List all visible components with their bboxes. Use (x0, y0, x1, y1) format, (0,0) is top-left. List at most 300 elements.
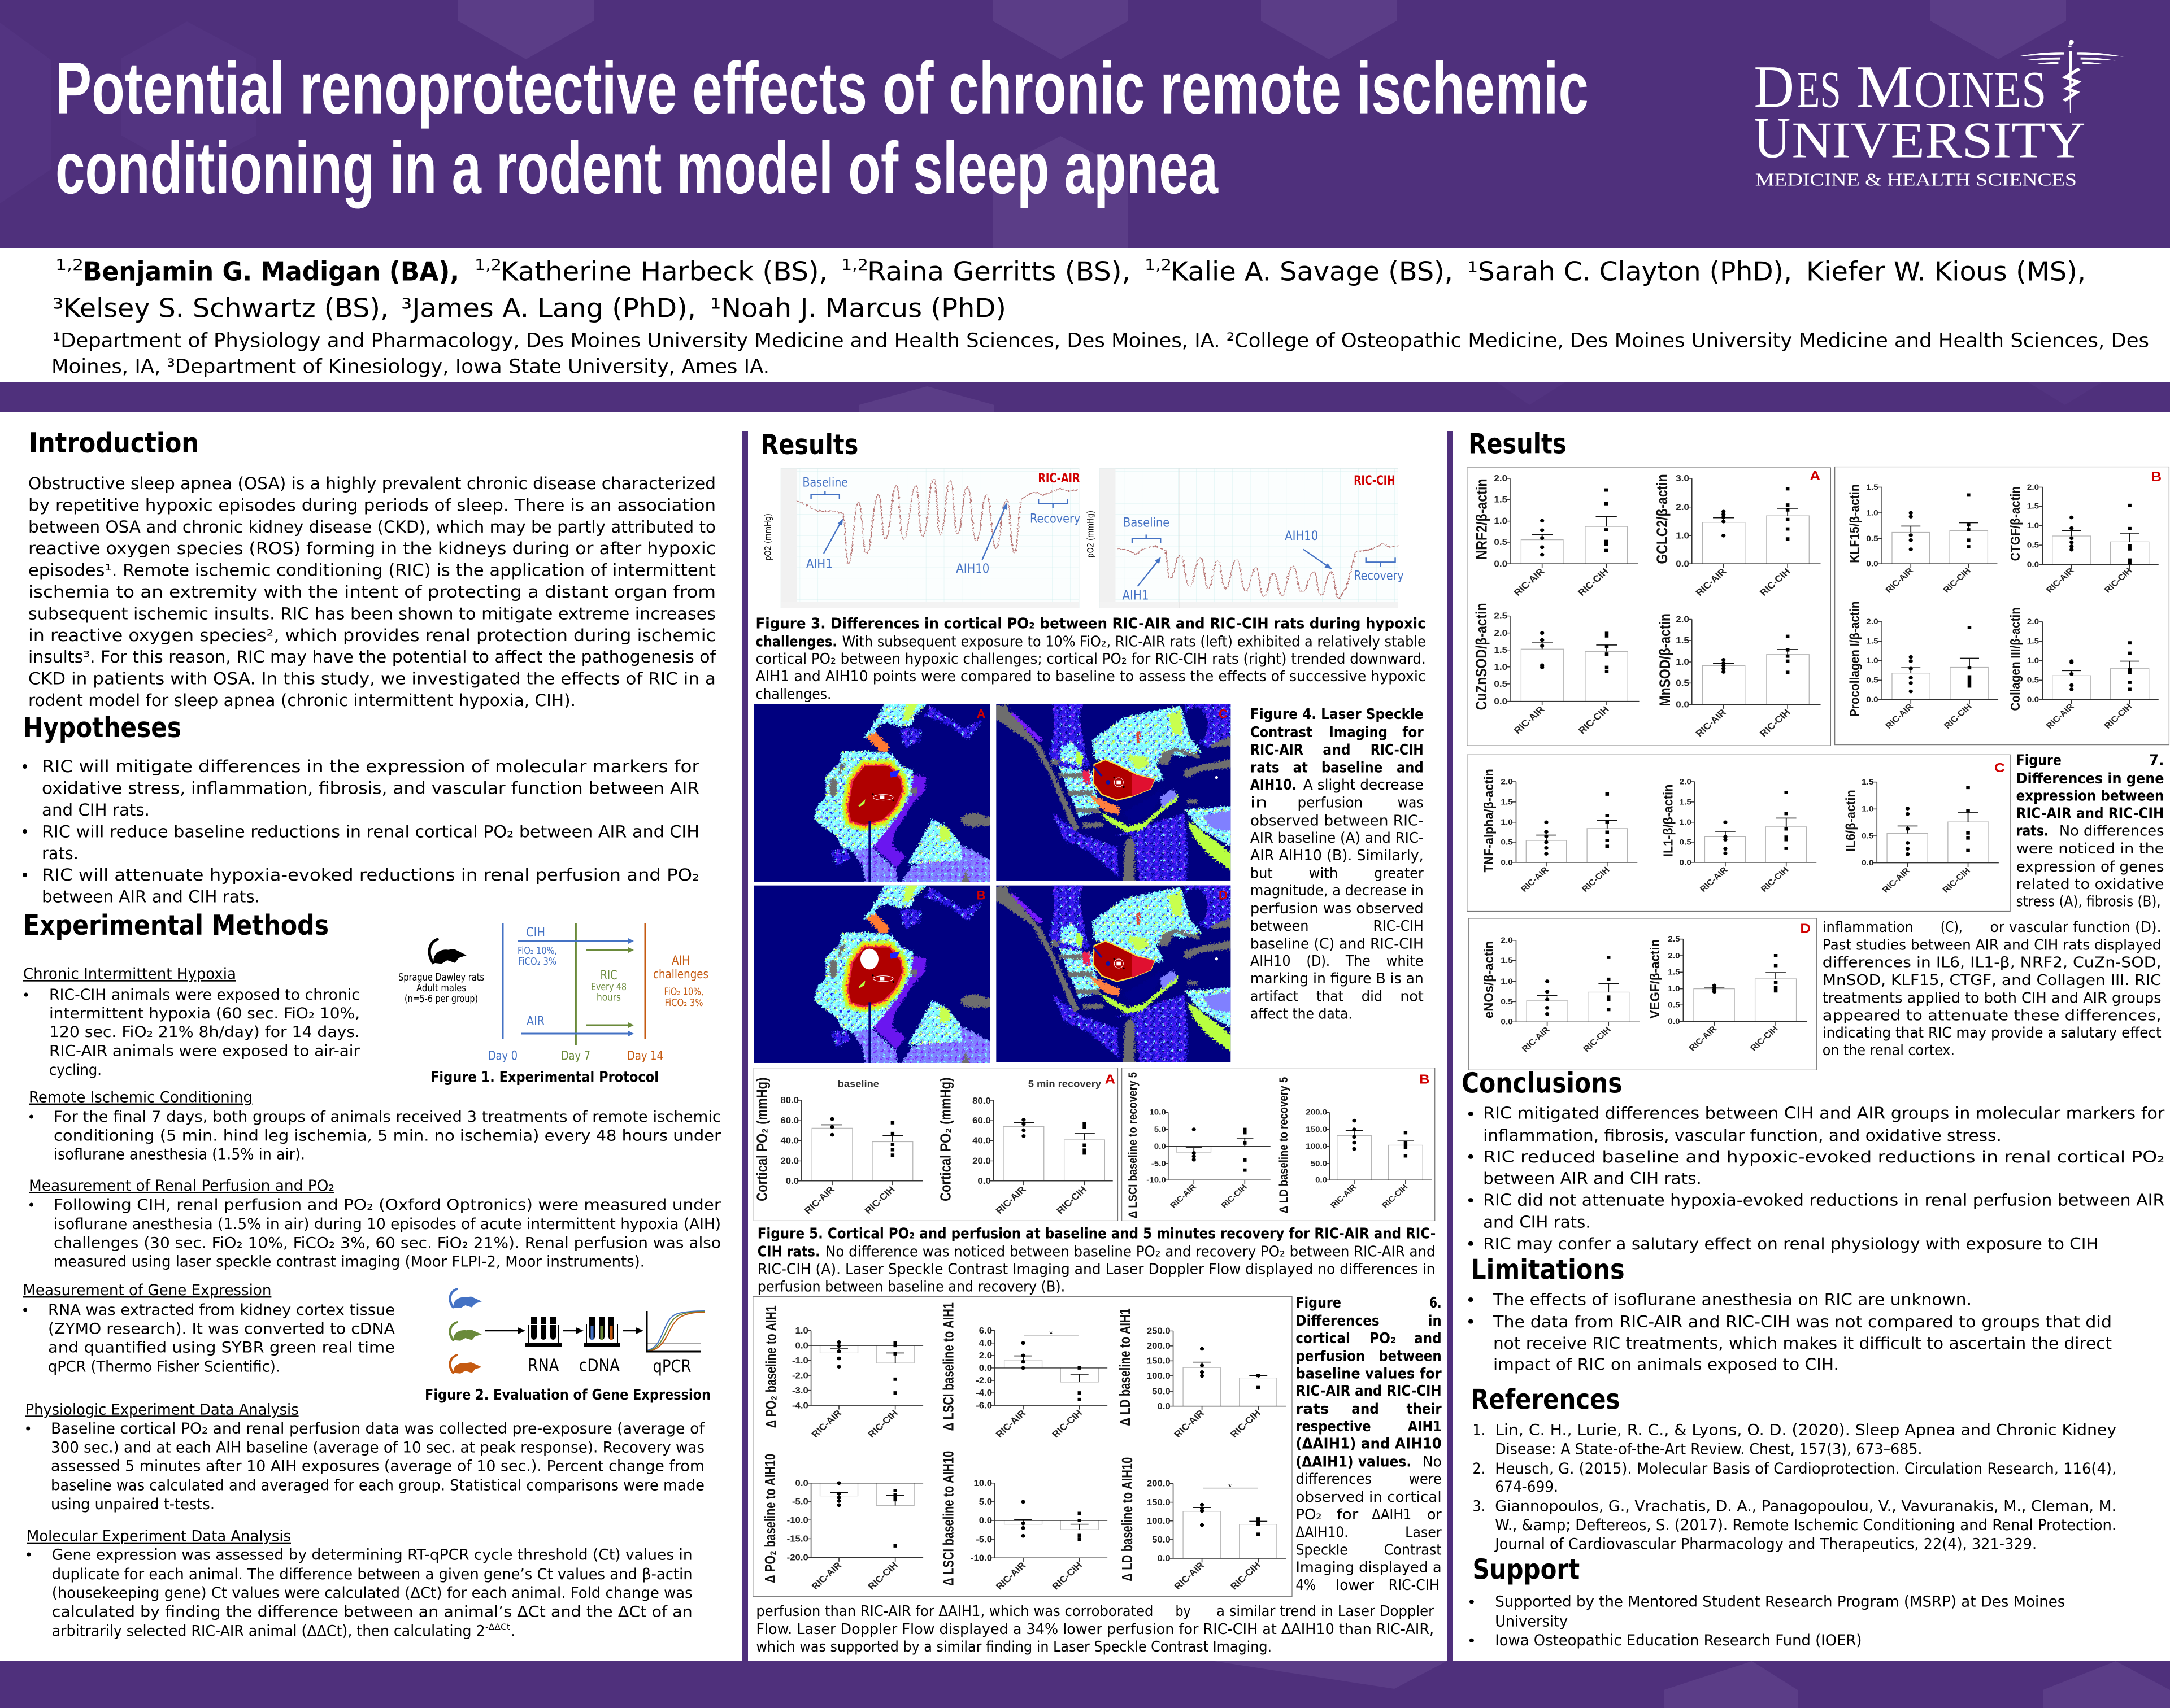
list: conclusions: RIC may confer a salutary effect on renal physiology with exposure to CIH (1483, 1235, 2099, 1254)
caption: figure 6: by (1176, 1603, 1191, 1620)
timeline labels: RIC (600, 969, 617, 983)
chart: LD baseline to AIH10: RIC-AIR (1172, 1560, 1206, 1592)
list: hypotheses (23, 757, 699, 907)
caption: figure 4: AIR AIH10 (B). Similarly, (1250, 847, 1424, 864)
chart: eNOs: 1.0 (1501, 977, 1513, 986)
chart: IL1-beta: RIC-CIH (1759, 865, 1791, 894)
panel: results column 3 (1467, 428, 2169, 1070)
panel: results column 2 upper (756, 429, 1426, 1022)
list: hypotheses: and CIH rats. (42, 800, 150, 820)
authors: Raina Gerritts (BS), (867, 256, 1130, 287)
caption: figure 4: that (1316, 988, 1343, 1005)
chart: LSCI baseline to AIH10: -10.0 (971, 1553, 992, 1563)
caption: figure 7: (C), (1941, 919, 1963, 936)
chart: LD baseline to recovery: Δ LD baseline to recovery 5 (1277, 1077, 1290, 1213)
text block: introduction body: CKD in patients with OSA. In this study, we investigated the effects of RIC in a (28, 669, 716, 689)
caption: figure 6: a similar trend in Laser Doppler (1216, 1603, 1434, 1620)
chart: Collagen III: Collagen III/β-actin (2008, 607, 2023, 711)
chart: LSCI baseline to AIH1: 0.0 (979, 1363, 992, 1373)
chart: LD baseline to recovery: 0.0 (1315, 1176, 1327, 1185)
authors: Kiefer W. Kious (MS), (1806, 256, 2086, 287)
chart: LD baseline to AIH1: 0.0 (1157, 1401, 1171, 1411)
figure 7 panel B (1835, 467, 2169, 745)
text block: introduction body: between OSA and chronic kidney disease (CKD), which may be partly attributed to (28, 517, 716, 537)
text: animals (398, 971, 484, 1005)
caption: figure 4: greater (1374, 865, 1424, 882)
method: gene expression: (ZYMO research). It was converted to cDNA (48, 1321, 395, 1338)
chart: PO2 baseline to AIH1: RIC-AIR (810, 1408, 844, 1440)
caption: figure 5: Figure 5. Cortical PO₂ and perfusion at baseline and 5 minutes recovery for RIC-AIR and RIC- (758, 1225, 1436, 1242)
chart: VEGF (1647, 922, 1811, 1053)
method: molecular data analysis: calculated by finding the difference between an animal’s ΔCt and the ΔCt of an (52, 1604, 693, 1621)
caption: figure 6: RIC-CIH (1389, 1577, 1440, 1594)
caption: figure 6: ΔAIH1 (1372, 1506, 1411, 1523)
chart: Procollagen I (1847, 602, 1998, 731)
timeline labels: Day 0 (488, 1049, 518, 1063)
text block: introduction body: in reactive oxygen species², which provides renal protection during ischemic (28, 626, 716, 645)
figure 7 panel D (1468, 918, 1816, 1070)
panel: hypotheses (23, 712, 699, 907)
chart: GCLC2: RIC-AIR (1694, 567, 1728, 598)
method: chronic intermittent hypoxia: 120 sec. FiO₂ 21% 8h/day) for 14 days. (49, 1023, 360, 1041)
figure 7 panel C (1467, 755, 2010, 911)
chart: IL1-beta: 0.5 (1680, 838, 1691, 847)
chart: 5 min recovery PO2: RIC-CIH (1054, 1184, 1089, 1216)
figure 3 chart: RIC-AIR: Recovery (1030, 511, 1080, 526)
chart: IL1-beta: 0.0 (1680, 859, 1691, 867)
authors (53, 256, 2086, 324)
caption: figure 4: magnitude, a decrease in (1250, 882, 1424, 899)
chart: IL1-beta: IL1-β/β-actin (1661, 785, 1676, 857)
text block: introduction body: rodent model for sleep apnea (chronic intermittent hypoxia, CIH). (28, 691, 576, 710)
text block: introduction body: episodes¹. Remote ischemic conditioning (RIC) is the application of intermittent (28, 561, 716, 580)
caption: figure 4: AIR baseline (A) and RIC- (1250, 830, 1424, 846)
method: remote ischemic conditioning: For the final 7 days, both groups of animals received 3 treatments of remote ischemic (54, 1108, 721, 1126)
figure 3 chart: RIC-CIH: Baseline (1123, 515, 1169, 530)
chart: TNF-alpha: RIC-CIH (1580, 865, 1612, 894)
caption: figure 7: MnSOD, KLF15, CTGF, and Collagen III. RIC (1823, 972, 2162, 989)
list: hypotheses: between AIR and CIH rats. (42, 887, 260, 907)
chart: LD baseline to AIH10: RIC-CIH (1228, 1560, 1263, 1592)
chart: VEGF: RIC-CIH (1749, 1025, 1780, 1053)
caption: figure 4: affect the data. (1250, 1006, 1353, 1022)
chart: Procollagen I: 0.5 (1866, 676, 1878, 685)
caption: figure 6: Speckle (1295, 1541, 1348, 1558)
chart: LD baseline to AIH1: 200.0 (1147, 1341, 1171, 1351)
caption: figure 6: which was supported by a similar finding in Laser Speckle Contrast Imaging. (756, 1639, 1272, 1655)
chart: baseline PO2: baseline (838, 1078, 879, 1089)
caption: figure 7 (1823, 752, 2164, 1059)
chart icon: qPCR curves (647, 1311, 705, 1352)
chart: MnSOD: MnSOD/β-actin (1657, 613, 1673, 706)
chart: LD baseline to AIH10: * (1228, 1482, 1232, 1492)
list: conclusions (1468, 1104, 2165, 1254)
chart: LSCI baseline to recovery (1126, 1072, 1271, 1218)
image B: B (977, 888, 986, 903)
caption: figure 3: With subsequent exposure to 10% FiO₂, RIC-AIR rats (left) exhibited a relatively stable (842, 633, 1426, 650)
timeline labels: FiO₂ 10%, (518, 945, 557, 957)
chart: PO2 baseline to AIH1 (763, 1305, 923, 1440)
text: animals: Adult males (416, 982, 466, 994)
chart: KLF15: 1.5 (1866, 483, 1878, 492)
chart: KLF15: 0.5 (1866, 534, 1878, 543)
caption: figure 6: Imaging displayed a (1295, 1559, 1442, 1576)
list: hypotheses: RIC will reduce baseline reductions in renal cortical PO₂ between AIR and CIH (42, 822, 699, 841)
chart: TNF-alpha: 0.5 (1501, 838, 1513, 847)
chart: Procollagen I: RIC-AIR (1884, 702, 1915, 731)
chart: NRF2: NRF2/β-actin (1474, 478, 1490, 559)
chart: VEGF: 0.0 (1668, 1018, 1680, 1026)
image D: D (1219, 888, 1228, 903)
chart: LSCI baseline to recovery: RIC-CIH (1220, 1183, 1249, 1210)
chart: LD baseline to recovery: RIC-AIR (1329, 1183, 1359, 1210)
chart: PO2 baseline to AIH1: -1.0 (792, 1356, 808, 1366)
method: renal perfusion and PO2: challenges (30 sec. FiO₂ 10%, FiCO₂ 3%, 60 sec. FiO₂ 21%). Renal perfusion was also (54, 1235, 721, 1252)
chart: GCLC2: RIC-CIH (1758, 567, 1793, 598)
chart: LSCI baseline to AIH1: 4.0 (979, 1338, 992, 1348)
caption: figure 4: and (1323, 742, 1351, 759)
chart: LSCI baseline to AIH1: -6.0 (976, 1401, 992, 1410)
chart: LD baseline to recovery: 50.0 (1311, 1160, 1327, 1168)
chart: LSCI baseline to recovery: -5.0 (1151, 1160, 1166, 1168)
caption: figure 3: AIH1 and AIH10 points were compared to baseline to assess the effects of successive hypoxic (756, 668, 1426, 685)
caption: figure 4: baseline (1321, 760, 1382, 776)
caption: figure 6: PO₂ (1369, 1330, 1396, 1347)
timeline labels: hours (597, 992, 621, 1004)
caption: figure 4: but (1250, 865, 1273, 882)
caption: figure 4: baseline (C) and RIC-CIH (1250, 936, 1424, 952)
chart: LD baseline to AIH1 (1117, 1308, 1286, 1440)
method: physiologic data analysis: Baseline cortical PO₂ and renal perfusion data was collected pre-exposure (average of (51, 1420, 705, 1437)
caption: figure 4: RIC-CIH (1373, 918, 1424, 935)
purple band under authors (0, 382, 2170, 412)
chart: IL1-beta (1661, 778, 1816, 894)
figure 3 chart: RIC-CIH: Recovery (1354, 568, 1404, 583)
list: support (1469, 1593, 2065, 1649)
chart: CuZnSOD (1473, 603, 1640, 736)
chart: LSCI baseline to AIH1: RIC-CIH (1050, 1408, 1084, 1440)
authors: 1,2 (475, 256, 502, 274)
caption: figure 3 (756, 615, 1426, 703)
chart: LSCI baseline to AIH1: 6.0 (979, 1326, 992, 1336)
method: chronic intermittent hypoxia: Chronic Intermittent Hypoxia (23, 965, 236, 983)
figure 2: gene expression workflow (425, 1289, 711, 1404)
caption: figure 7: on the renal cortex. (1823, 1042, 1955, 1059)
image C: C (1219, 707, 1228, 721)
chart: LD baseline to AIH1: Δ LD baseline to AIH1 (1117, 1308, 1133, 1426)
list: conclusions: inflammation, fibrosis, vascular function, and oxidative stress. (1483, 1127, 2002, 1145)
chart: LD baseline to recovery: RIC-CIH (1380, 1183, 1410, 1210)
figure 7 panel A (1467, 468, 1830, 746)
icons: three rats (450, 1289, 482, 1374)
chart: LSCI baseline to recovery: Δ LSCI baseline to recovery 5 (1126, 1072, 1140, 1218)
panel: conclusions, limitations, references, support (1462, 1068, 2165, 1649)
caption: figure 6: No (1423, 1453, 1442, 1470)
chart: IL6: 1.5 (1862, 778, 1874, 787)
chart: CTGF: 1.5 (2027, 502, 2039, 511)
chart: MnSOD: 1.5 (1676, 636, 1689, 646)
method: renal perfusion and PO2: isoflurane anesthesia (1.5% in air) during 10 episodes of acute intermittent hypoxia (AIH) (54, 1215, 721, 1233)
figure 3 chart: RIC-AIR: AIH10 (956, 561, 989, 576)
chart: NRF2: 0.5 (1494, 538, 1507, 547)
caption: figure 6: were (1408, 1471, 1442, 1488)
chart: GCLC2: 1.0 (1676, 531, 1689, 541)
figure 3 chart: RIC-AIR (763, 468, 1080, 608)
caption: figure 5: CIH rats. (758, 1244, 820, 1260)
chart: baseline PO2: 40.0 (780, 1136, 799, 1145)
chart: CTGF: 0.0 (2027, 561, 2039, 569)
chart: IL1-beta: RIC-AIR (1698, 865, 1730, 894)
method: remote ischemic conditioning: conditioning (5 min. hind leg ischemia, 5 min. no ischemia) every 48 hours under (54, 1127, 721, 1145)
heading: Results: Results (1468, 428, 1567, 460)
caption: figure 6: Contrast (1384, 1541, 1442, 1558)
method: chronic intermittent hypoxia (23, 965, 360, 1079)
caption: figure 4: rats (1250, 760, 1280, 776)
heading: Limitations: Limitations (1471, 1254, 1625, 1286)
authors: Katherine Harbeck (BS), (501, 256, 828, 287)
chart: Collagen III: B (2151, 470, 2162, 484)
method: gene expression: RNA was extracted from kidney cortex tissue (48, 1301, 395, 1319)
chart: CuZnSOD: RIC-CIH (1576, 704, 1611, 736)
caption: figure 4: AIH10. (1250, 777, 1297, 794)
timeline labels: FiO₂ 10%, (664, 986, 704, 998)
logo: Des Moines University: U (1754, 106, 1790, 170)
chart: LSCI baseline to recovery: RIC-AIR (1169, 1183, 1198, 1210)
method: physiologic data analysis: 300 sec.) and at each AIH baseline (average of 10 sec. at peak response). Recovery was (51, 1439, 705, 1457)
caption: figure 7: were noticed in the (2016, 840, 2164, 857)
chart: PO2 baseline to AIH10: -5.0 (792, 1497, 808, 1506)
chart: KLF15: KLF15/β-actin (1847, 484, 1862, 563)
method: chronic intermittent hypoxia: RIC-CIH animals were exposed to chronic (49, 986, 360, 1004)
timeline labels (488, 926, 708, 1063)
authors: ³Kelsey S. Schwartz (BS), (53, 293, 389, 324)
chart: PO2 baseline to AIH1: -2.0 (792, 1371, 808, 1380)
chart: LD baseline to recovery: 200.0 (1306, 1108, 1327, 1117)
chart: TNF-alpha: RIC-AIR (1519, 865, 1551, 894)
icon: rat (429, 939, 467, 964)
method: molecular data analysis: -ΔΔCt (485, 1622, 510, 1632)
text block: introduction body: by repetitive hypoxic episodes during periods of sleep. There is an association (28, 495, 716, 515)
logo: Des Moines University: NIVERSITY (1792, 112, 2086, 169)
panel: results column 2 lower (753, 1068, 1442, 1655)
method: physiologic data analysis: Physiologic Experiment Data Analysis (25, 1401, 299, 1418)
caption: figure 6: Differences (1295, 1313, 1380, 1330)
caption: figure 5 (758, 1225, 1436, 1295)
caption: figure 6: Laser (1405, 1524, 1442, 1541)
chart: GCLC2: GCLC2/β-actin (1654, 474, 1671, 564)
caption: figure 4: Figure 4. Laser Speckle (1250, 706, 1424, 723)
heading: Hypotheses: Hypotheses (23, 712, 181, 744)
timeline labels: FiCO₂ 3% (664, 997, 703, 1009)
chart: LD baseline to AIH10 (1119, 1457, 1286, 1592)
chart: Collagen III: RIC-AIR (2045, 702, 2076, 731)
caption: figure 6: baseline values for (1295, 1365, 1442, 1382)
chart: PO2 baseline to AIH10: RIC-AIR (810, 1560, 844, 1592)
caption: figure 4: RIC-CIH (1371, 742, 1424, 759)
chart: 5 min recovery PO2: RIC-AIR (994, 1184, 1028, 1216)
chart: Collagen III: 1.0 (2027, 657, 2039, 665)
method: renal perfusion and PO2: Following CIH, renal perfusion and PO₂ (Oxford Optronics) were measured under (54, 1196, 721, 1214)
chart: VEGF: 2.5 (1668, 935, 1680, 944)
caption: figure 6: lower (1336, 1577, 1375, 1594)
figure 3 chart: RIC-AIR: Baseline (802, 474, 848, 490)
image D (993, 882, 1236, 1068)
caption: figure 7: differences in IL6, IL1-β, NRF2, CuZn-SOD, (1823, 955, 2162, 971)
chart: CuZnSOD: 0.5 (1494, 679, 1507, 689)
chart: CuZnSOD: 2.5 (1494, 611, 1507, 621)
authors: ¹Sarah C. Clayton (PhD), (1467, 256, 1792, 287)
caption: figure 4: marking in figure B is an (1250, 970, 1424, 987)
caption: figure 6: and (1414, 1330, 1442, 1347)
chart: NRF2: 1.5 (1494, 495, 1507, 504)
chart: LD baseline to AIH1: 150.0 (1147, 1356, 1171, 1366)
chart: CuZnSOD: 0.0 (1494, 696, 1507, 707)
caption: figure 6: ΔAIH10. (1295, 1524, 1349, 1541)
chart: PO2 baseline to AIH10: -15.0 (787, 1534, 808, 1544)
labels (528, 1356, 692, 1376)
chart: TNF-alpha (1481, 769, 1637, 894)
chart: LD baseline to AIH1: RIC-CIH (1228, 1408, 1263, 1440)
list: conclusions: between AIR and CIH rats. (1483, 1169, 1702, 1188)
chart: CuZnSOD: 2.0 (1494, 628, 1507, 638)
caption: figure 6: their (1406, 1401, 1442, 1418)
chart: IL1-beta: 1.5 (1680, 798, 1691, 807)
caption: figure 3: challenges. (756, 633, 837, 650)
chart: NRF2: 1.0 (1494, 516, 1507, 526)
list: references: 2. (1472, 1459, 1485, 1477)
chart: VEGF: RIC-AIR (1687, 1025, 1719, 1053)
chart: eNOs: 1.5 (1501, 957, 1513, 965)
chart: PO2 baseline to AIH1: RIC-CIH (866, 1408, 900, 1440)
heading: Conclusions: Conclusions (1462, 1068, 1623, 1100)
list: references: 674-699. (1495, 1478, 1558, 1496)
list: hypotheses: RIC will mitigate differences in the expression of molecular markers for (42, 757, 699, 776)
method: molecular data analysis: arbitrarily selected RIC-AIR animal (ΔΔCt), then calculating 2 (52, 1622, 485, 1640)
chart: MnSOD (1657, 469, 1821, 739)
authors: 1,2 (55, 256, 84, 274)
method: molecular data analysis (27, 1528, 693, 1640)
chart: Procollagen I: 1.5 (1866, 637, 1878, 646)
title: Potential renoprotective effects of chronic remote ischemic (55, 47, 1589, 129)
chart: PO2 baseline to AIH1: -4.0 (792, 1401, 808, 1410)
chart: LSCI baseline to AIH10: RIC-CIH (1050, 1560, 1084, 1592)
logo: Des Moines University: OINES (1914, 60, 2046, 119)
chart: KLF15 (1847, 483, 1997, 595)
list: hypotheses: rats. (42, 844, 79, 863)
chart: CTGF (2008, 483, 2159, 595)
title (55, 47, 1589, 209)
chart: NRF2: 0.0 (1494, 559, 1507, 569)
chart: TNF-alpha: 0.0 (1501, 859, 1513, 867)
chart: LD baseline to AIH10: 50.0 (1152, 1535, 1171, 1545)
caption: figure 7: Figure (2016, 752, 2062, 769)
caption: figure 6: Flow. Laser Doppler Flow displayed a 34% lower perfusion for RIC-CIH at ΔAIH10 than RIC-AIR, (756, 1621, 1434, 1638)
chart: LSCI baseline to AIH1: RIC-AIR (994, 1408, 1028, 1440)
timeline labels: challenges (653, 968, 708, 982)
panel: introduction (28, 427, 716, 710)
caption: figure 2: Figure 2. Evaluation of Gene Expression (425, 1387, 711, 1404)
chart: KLF15: RIC-AIR (1884, 567, 1915, 595)
chart: IL6: 0.0 (1862, 859, 1874, 868)
caption: figure 4: perfusion (1298, 794, 1363, 811)
chart: Procollagen I: 1.0 (1866, 657, 1878, 665)
chart: Procollagen I: 0.0 (1866, 696, 1878, 704)
icon: RNA tube rack (526, 1317, 561, 1347)
chart: NRF2: RIC-CIH (1576, 567, 1611, 598)
text block: introduction body: Obstructive sleep apnea (OSA) is a highly prevalent chronic disease characterized (28, 474, 716, 493)
caption: figure 4: not (1400, 988, 1424, 1005)
caption: figure 6: in (1428, 1313, 1442, 1330)
chart: IL6: IL6/β-actin (1843, 790, 1858, 852)
text block: introduction body: ischemia to an extremity with the intent of protecting a distant organ from (28, 582, 716, 602)
authors: Benjamin G. Madigan (BA), (83, 256, 459, 287)
caption: figure 4: The (1345, 953, 1371, 970)
method: physiologic data analysis: using unpaired t-tests. (51, 1496, 215, 1513)
authors: ³James A. Lang (PhD), (401, 293, 696, 324)
caption: figure 4: artifact (1250, 988, 1298, 1005)
figure 3 chart: RIC-CIH: pO2 (mmHg) (1085, 511, 1096, 558)
affiliations: Moines, IA, ³Department of Kinesiology, Iowa State University, Ames IA. (51, 356, 769, 378)
authors: 1,2 (1145, 256, 1172, 274)
chart: KLF15: RIC-CIH (1941, 567, 1973, 595)
caption: figure 4: between (1250, 918, 1308, 935)
chart: IL6: 0.5 (1862, 832, 1874, 840)
chart: baseline PO2: RIC-CIH (863, 1184, 897, 1216)
method: gene expression (23, 1282, 395, 1375)
chart: eNOs: 0.5 (1501, 997, 1513, 1006)
chart: MnSOD: 0.0 (1676, 700, 1689, 709)
chart: LD baseline to AIH1: RIC-AIR (1172, 1408, 1206, 1440)
chart: GCLC2 (1654, 474, 1821, 598)
header band (0, 0, 2170, 248)
timeline labels: CIH (526, 926, 545, 940)
caption: figure 6: AIH1 (1408, 1418, 1442, 1435)
figure 6 charts panel (753, 1296, 1292, 1597)
figure 3 chart: RIC-AIR: AIH1 (806, 556, 833, 571)
chart: baseline PO2: 0.0 (786, 1176, 799, 1186)
method: gene expression: and quantified using SYBR green real time (48, 1339, 395, 1357)
method: physiologic data analysis: assessed 5 minutes after 10 AIH exposures (average of 10 sec.). Percent change from (51, 1458, 705, 1475)
chart: PO2 baseline to AIH1: 0.0 (795, 1341, 808, 1350)
image B (754, 882, 994, 1068)
method: chronic intermittent hypoxia: RIC-AIR animals were exposed to air-air (49, 1043, 360, 1060)
method: gene expression: Measurement of Gene Expression (23, 1282, 271, 1299)
list: hypotheses: oxidative stress, inflammation, fibrosis, and vascular function between AIR (42, 779, 699, 798)
caption: figure 4: white (1386, 953, 1424, 970)
method: physiologic data analysis (25, 1401, 705, 1513)
list: references: Giannopoulos, G., Vrachatis, D. A., Panagopoulou, V., Vavuranakis, M., Cleman, M. (1495, 1497, 2116, 1515)
chart: NRF2 (1474, 474, 1638, 598)
chart: LD baseline to recovery: B (1419, 1072, 1430, 1087)
caption: figure 1: Figure 1. Experimental Protocol (430, 1069, 659, 1086)
chart: PO2 baseline to AIH1: 1.0 (795, 1326, 808, 1336)
timeline labels: Every 48 (591, 981, 627, 993)
chart: IL1-beta: 1.0 (1680, 818, 1691, 827)
arrowheads (628, 938, 634, 1036)
chart: VEGF: 1.0 (1668, 985, 1680, 994)
caption: figure 5: perfusion between baseline and recovery (B). (758, 1278, 1065, 1295)
method: molecular data analysis: duplicate for each animal. The difference between a given gene’s Ct values and β-actin (52, 1566, 693, 1583)
method: renal perfusion and PO2 (29, 1177, 721, 1271)
list: support: University (1495, 1613, 1568, 1630)
chart: IL6 (1843, 761, 2005, 895)
chart: Collagen III (2008, 470, 2162, 731)
logo: Des Moines University (1754, 40, 2124, 190)
figure 4: laser speckle images (754, 700, 1236, 1068)
caption: figure 6: rats (1295, 1401, 1329, 1418)
chart: TNF-alpha: 1.5 (1501, 798, 1513, 807)
list: limitations: not receive RIC treatments, which makes it difficult to ascertain the direct (1493, 1334, 2112, 1353)
